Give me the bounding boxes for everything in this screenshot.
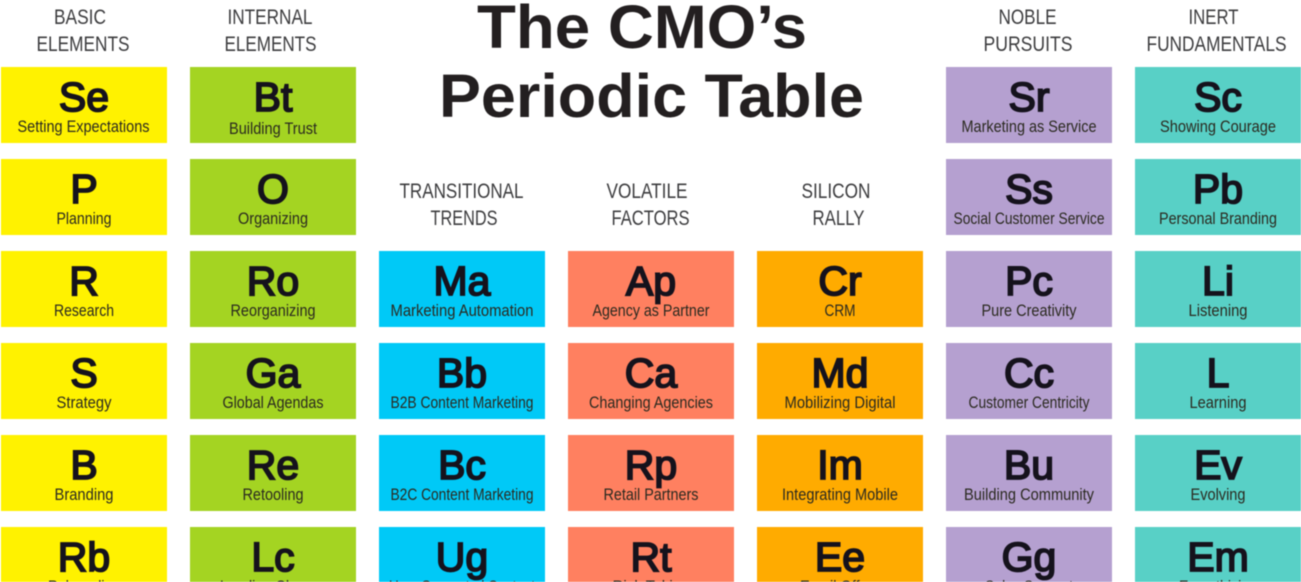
element: Ev: Ev [1194, 442, 1242, 488]
element: Ss: Social Customer Service [954, 210, 1104, 228]
element: Bt: Building Trust [229, 120, 317, 138]
element: O: Organizing [238, 210, 308, 228]
element: Rp: Rp [625, 442, 677, 488]
element: Sr: Marketing as Service [962, 118, 1096, 136]
element: Cr [757, 251, 923, 327]
element: Bc [379, 435, 545, 511]
element: Rp: Retail Partners [604, 486, 698, 504]
element: Rt [568, 527, 734, 582]
element: Ga [190, 343, 356, 419]
heading: silicon rally: SILICON [802, 180, 870, 203]
element: Ro [190, 251, 356, 327]
element: Pc: Pc [1005, 258, 1053, 304]
panel: volatile factors [568, 180, 734, 582]
element: Ap: Agency as Partner [592, 302, 710, 320]
panel: noble pursuits [946, 6, 1112, 582]
element: Md: Mobilizing Digital [784, 394, 896, 412]
element: Md [757, 343, 923, 419]
element: Bb [379, 343, 545, 419]
element: Bu: Building Community [964, 486, 1095, 504]
element: Re: Retooling [242, 486, 304, 504]
element: Se: Setting Expectations [18, 118, 150, 136]
panel: basic elements [1, 6, 167, 582]
element: Im [757, 435, 923, 511]
element: S [1, 343, 167, 419]
element: Gg [946, 527, 1112, 582]
element: L: Learning [1190, 394, 1246, 412]
element: P: P [70, 166, 98, 212]
element: Cc: Cc [1004, 350, 1054, 396]
element: Sc [1135, 67, 1301, 143]
element: Sr [946, 67, 1112, 143]
element: Li: Li [1202, 258, 1234, 304]
element: Ev [1135, 435, 1301, 511]
title: Periodic Table [439, 62, 864, 130]
element: Ma: Ma [434, 258, 491, 304]
element: Em: Em [1187, 534, 1249, 580]
element: R: R [69, 258, 99, 304]
element: Ca [568, 343, 734, 419]
element: Se [1, 67, 167, 143]
element: Gg: Gg [1002, 534, 1056, 580]
element: Ma: Marketing Automation [390, 302, 534, 320]
element: Rb: Rb [58, 534, 110, 580]
heading: basic elements: ELEMENTS [36, 33, 130, 56]
heading: internal elements: INTERNAL [228, 6, 312, 29]
element: Rt: Rt [630, 534, 672, 580]
element: Em [1135, 527, 1301, 582]
element: P: Planning [56, 210, 112, 228]
element: Ca: Changing Agencies [589, 394, 713, 412]
title [439, 0, 864, 130]
element: O [190, 159, 356, 235]
element: Bu: Bu [1004, 442, 1054, 488]
element: B: B [70, 442, 98, 488]
element: Bb: B2B Content Marketing [390, 394, 534, 412]
element: Cc: Customer Centricity [968, 394, 1090, 412]
element: B [1, 435, 167, 511]
element: R: Research [54, 302, 114, 320]
element: Ee: Ee [815, 534, 865, 580]
element: Ro: Reorganizing [230, 302, 316, 320]
element: Im: Im [817, 442, 863, 488]
element: S: Strategy [56, 394, 112, 412]
heading: noble pursuits: PURSUITS [984, 33, 1072, 56]
element: Cr: CRM [824, 302, 856, 320]
element: Pb: Personal Branding [1159, 210, 1277, 228]
heading: transitional trends [400, 180, 524, 230]
element: Ma [379, 251, 545, 327]
element: Ga: Global Agendas [222, 394, 324, 412]
heading: volatile factors [606, 180, 690, 230]
heading: internal elements: ELEMENTS [224, 33, 316, 56]
heading: volatile factors: VOLATILE [606, 180, 688, 203]
heading: inert fundamentals: INERT [1188, 6, 1239, 29]
panel: inert fundamentals [1135, 6, 1301, 582]
element: Sr: Sr [1008, 74, 1050, 120]
element: Ee [757, 527, 923, 582]
element: Md: Md [812, 350, 868, 396]
panel: transitional trends [379, 180, 545, 582]
element: Pc: Pure Creativity [982, 302, 1077, 320]
element: Pb [1135, 159, 1301, 235]
element: Bt: Bt [254, 74, 293, 120]
heading: silicon rally [802, 180, 870, 230]
element: Re: Re [247, 442, 299, 488]
element: Cr: Cr [818, 258, 862, 304]
element: Ga: Ga [246, 350, 301, 396]
element: Ug: Ug [436, 534, 488, 580]
panel: internal elements [190, 6, 356, 582]
element: Bu [946, 435, 1112, 511]
element: P [1, 159, 167, 235]
heading: transitional trends: TRENDS [430, 207, 498, 230]
element: Pc [946, 251, 1112, 327]
element: Ss [946, 159, 1112, 235]
element: Bc: B2C Content Marketing [390, 486, 534, 504]
element: R [1, 251, 167, 327]
heading: basic elements: BASIC [54, 6, 106, 29]
heading: volatile factors: FACTORS [612, 207, 690, 230]
element: Ss: Ss [1005, 166, 1053, 212]
heading: silicon rally: RALLY [812, 207, 864, 230]
element: Lc: Lc [251, 534, 295, 580]
heading: internal elements [224, 6, 316, 56]
element: Ev: Evolving [1190, 486, 1246, 504]
element: Ca: Ca [625, 350, 677, 396]
element: Rp [568, 435, 734, 511]
element: Ap [568, 251, 734, 327]
element: L: L [1207, 350, 1229, 396]
element: Lc [190, 527, 356, 582]
element: Pb: Pb [1193, 166, 1243, 212]
element: Ro: Ro [247, 258, 299, 304]
heading: transitional trends: TRANSITIONAL [400, 180, 524, 203]
element: B: Branding [54, 486, 114, 504]
element: Cc [946, 343, 1112, 419]
heading: noble pursuits [984, 6, 1072, 56]
element: Se: Se [59, 74, 109, 120]
element: Ug [379, 527, 545, 582]
element: Bc: Bc [438, 442, 486, 488]
element: S: S [70, 350, 98, 396]
element: Bt [190, 67, 356, 143]
element: Bb: Bb [437, 350, 487, 396]
heading: noble pursuits: NOBLE [998, 6, 1056, 29]
element: Ap: Ap [626, 258, 676, 304]
element: Sc: Sc [1194, 74, 1242, 120]
element: Sc: Showing Courage [1160, 118, 1276, 136]
element: L [1135, 343, 1301, 419]
heading: inert fundamentals [1146, 6, 1286, 56]
element: O: O [257, 166, 289, 212]
panel: silicon rally [757, 180, 923, 582]
element: Im: Integrating Mobile [782, 486, 898, 504]
element: Re [190, 435, 356, 511]
element: Li [1135, 251, 1301, 327]
element: Li: Listening [1188, 302, 1248, 320]
heading: basic elements [36, 6, 130, 56]
element: Rb [1, 527, 167, 582]
